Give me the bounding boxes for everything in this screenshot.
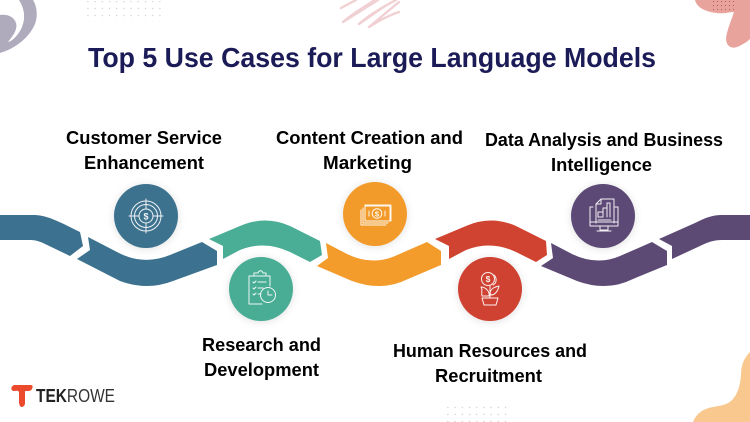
ribbon: blue segment 2	[77, 237, 217, 286]
icon: banknotes: $	[375, 210, 380, 218]
label: human resources and recruitment: Human Resources and	[393, 340, 587, 361]
label: customer service enhancement	[66, 127, 222, 173]
ribbon: red segment	[435, 220, 547, 262]
label: content creation and marketing: Content Creation and	[276, 127, 463, 148]
label: human resources and recruitment	[393, 340, 587, 386]
decorative blob: top left spiral	[0, 0, 37, 53]
label: research and development	[202, 334, 321, 380]
title: Top 5 Use Cases for Large Language Models	[88, 42, 656, 73]
step 4 circle with plant icon	[458, 257, 522, 321]
label: customer service enhancement: Customer Service	[66, 127, 222, 148]
icon: report on monitor	[590, 199, 618, 231]
ribbon: purple segment 2	[659, 215, 750, 259]
logo: tekrowe	[11, 385, 115, 407]
label: research and development: Research and	[202, 334, 321, 355]
ribbon: purple segment 1	[541, 242, 667, 286]
step 2 circle with clipboard icon	[229, 257, 293, 321]
step 3 circle with money icon	[343, 182, 407, 246]
icon: money plant: $	[486, 274, 491, 284]
icon: dollar target: $	[143, 212, 149, 222]
ribbon: orange segment	[317, 242, 441, 286]
icon: clipboard and clock	[249, 271, 276, 304]
label: data analysis and business intelligence: Data Analysis and Business	[485, 129, 723, 150]
label: research and development: Development	[204, 359, 319, 380]
logo wordmark: TEKROWE	[36, 386, 115, 406]
label: data analysis and business intelligence: Intelligence	[551, 154, 652, 175]
decorative blob: bottom right	[693, 352, 750, 422]
step 1 circle with target icon	[114, 184, 178, 248]
step 5 circle with analytics icon	[571, 184, 635, 248]
label: customer service enhancement: Enhancement	[84, 152, 204, 173]
ribbon: teal segment	[209, 220, 322, 262]
decorative blob: top right	[695, 0, 750, 48]
decorative scribble: top	[341, 0, 399, 27]
label: data analysis and business intelligence	[485, 129, 723, 175]
label: content creation and marketing: Marketing	[323, 152, 412, 173]
decorative dots: bottom	[447, 405, 507, 422]
label: content creation and marketing	[276, 127, 463, 173]
ribbon: blue segment 1	[0, 215, 83, 256]
decorative dots: top	[87, 1, 161, 22]
decorative dots: top right	[713, 1, 734, 11]
logo mark	[11, 385, 33, 407]
label: human resources and recruitment: Recruitment	[435, 365, 542, 386]
